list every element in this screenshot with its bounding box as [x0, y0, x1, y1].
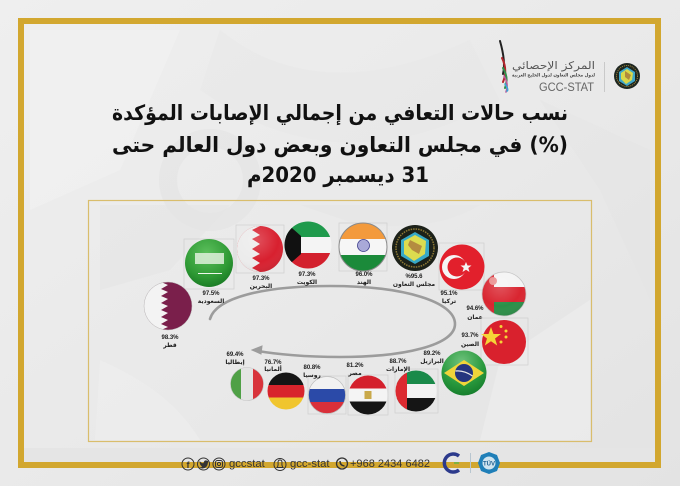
label: Brazil: 89.2% [423, 351, 441, 357]
label: Italy: إيطاليا [225, 359, 245, 366]
flag: Russia [308, 376, 346, 414]
label: Russia: 80.8% [303, 365, 321, 371]
label: GCC: مجلس التعاون [393, 281, 435, 288]
label: Saudi Arabia: السعودية [198, 298, 224, 305]
label: Egypt [346, 363, 364, 377]
logo ribbon [500, 41, 508, 92]
footer: contact details [182, 452, 500, 474]
title line 2: (%) في مجلس التعاون وبعض دول العالم حتى [112, 133, 568, 157]
label: Bahrain [250, 276, 272, 290]
label: GCC: %95.6 [405, 274, 423, 280]
logo Arabic name: المركز الإحصائي [512, 60, 595, 72]
arrow: circular flow [210, 286, 455, 357]
label: Italy: 69.4% [226, 352, 244, 358]
flag: Germany [267, 372, 305, 410]
label: Brazil [420, 351, 444, 365]
icon: GCC emblem [614, 63, 640, 89]
label: Kuwait: 97.3% [298, 272, 316, 278]
flag: Saudi Arabia [185, 239, 233, 287]
logo: GCC-STAT [500, 41, 605, 94]
label: Egypt: 81.2% [346, 363, 364, 369]
icon: facebook [182, 458, 194, 470]
label: Germany: ألمانيا [264, 365, 282, 373]
label: UAE [386, 359, 410, 373]
title [112, 101, 568, 187]
label: Bahrain: البحرين [250, 283, 272, 290]
flag: Brazil [442, 350, 486, 396]
label: Oman: 94.6% [466, 306, 484, 312]
label: Oman: عمان [467, 314, 483, 321]
label: Germany [264, 360, 282, 373]
flag: GCC emblem [392, 225, 438, 271]
label: Qatar [161, 335, 179, 349]
label: China [461, 333, 479, 348]
label: Turkey: 95.1% [440, 291, 458, 297]
text: phone number: +968 2434 6482 [350, 458, 430, 470]
label: Saudi Arabia: 97.5% [202, 291, 220, 297]
label: India [355, 272, 373, 286]
label: Qatar: قطر [162, 342, 177, 349]
label: Italy [225, 352, 245, 366]
logo Arabic subtitle: لدول مجلس التعاون لدول الخليج العربية [512, 74, 595, 78]
icon: TUV badge [478, 452, 500, 474]
icon: twitter [198, 458, 210, 470]
label: Russia [303, 365, 321, 379]
label: India: الهند [357, 279, 371, 286]
chart: circular flag ranking [144, 221, 528, 416]
flag: Oman [482, 272, 526, 316]
logo GCC-STAT wordmark: GCC-STAT [539, 80, 595, 94]
icon: quality mark [444, 454, 459, 472]
label: Qatar: 98.3% [161, 335, 179, 341]
label: Saudi Arabia [198, 291, 224, 305]
icon: instagram [213, 458, 225, 470]
panel frame [88, 200, 592, 442]
label: Turkey [440, 291, 458, 305]
flag: Egypt [348, 375, 388, 416]
label: Germany: 76.7% [264, 360, 282, 366]
label: Bahrain: 97.3% [252, 276, 270, 282]
label: Kuwait [297, 272, 317, 286]
icon: whatsapp [336, 458, 348, 469]
flag: Italy [230, 367, 264, 401]
flag: Qatar [144, 282, 192, 330]
title line 1: نسب حالات التعافي من إجمالي الإصابات المؤكدة [112, 101, 568, 125]
label: Turkey: تركيا [442, 298, 456, 305]
label: China: الصين [461, 341, 479, 348]
flag: Turkey [440, 244, 484, 290]
flag: India [339, 223, 387, 271]
label: UAE: 88.7% [389, 359, 407, 365]
label: Russia: روسيا [303, 372, 321, 379]
flag: UAE [395, 370, 437, 412]
faint flag image boxes [184, 223, 528, 415]
label: India: 96.0% [355, 272, 373, 278]
label: UAE: الإمارات [386, 366, 410, 373]
label: Egypt: مصر [347, 370, 362, 377]
flag: Bahrain [237, 226, 283, 272]
label: GCC [393, 274, 435, 288]
flag: China [481, 320, 526, 364]
icon: snapchat [274, 458, 286, 470]
label: Brazil: البرازيل [420, 358, 444, 365]
label: China: 93.7% [461, 333, 479, 339]
flag: Kuwait [284, 221, 332, 269]
text: gcc-stat handle: gcc-stat [290, 458, 330, 470]
label: Oman [466, 306, 484, 321]
icon: facebook: f [186, 460, 190, 470]
title line 3: 31 ديسمبر 2020م [247, 163, 429, 187]
icon: TUV badge: TÜV [483, 460, 495, 468]
label: Kuwait: الكويت [297, 279, 317, 286]
text: gccstat handle: gccstat [229, 458, 266, 470]
